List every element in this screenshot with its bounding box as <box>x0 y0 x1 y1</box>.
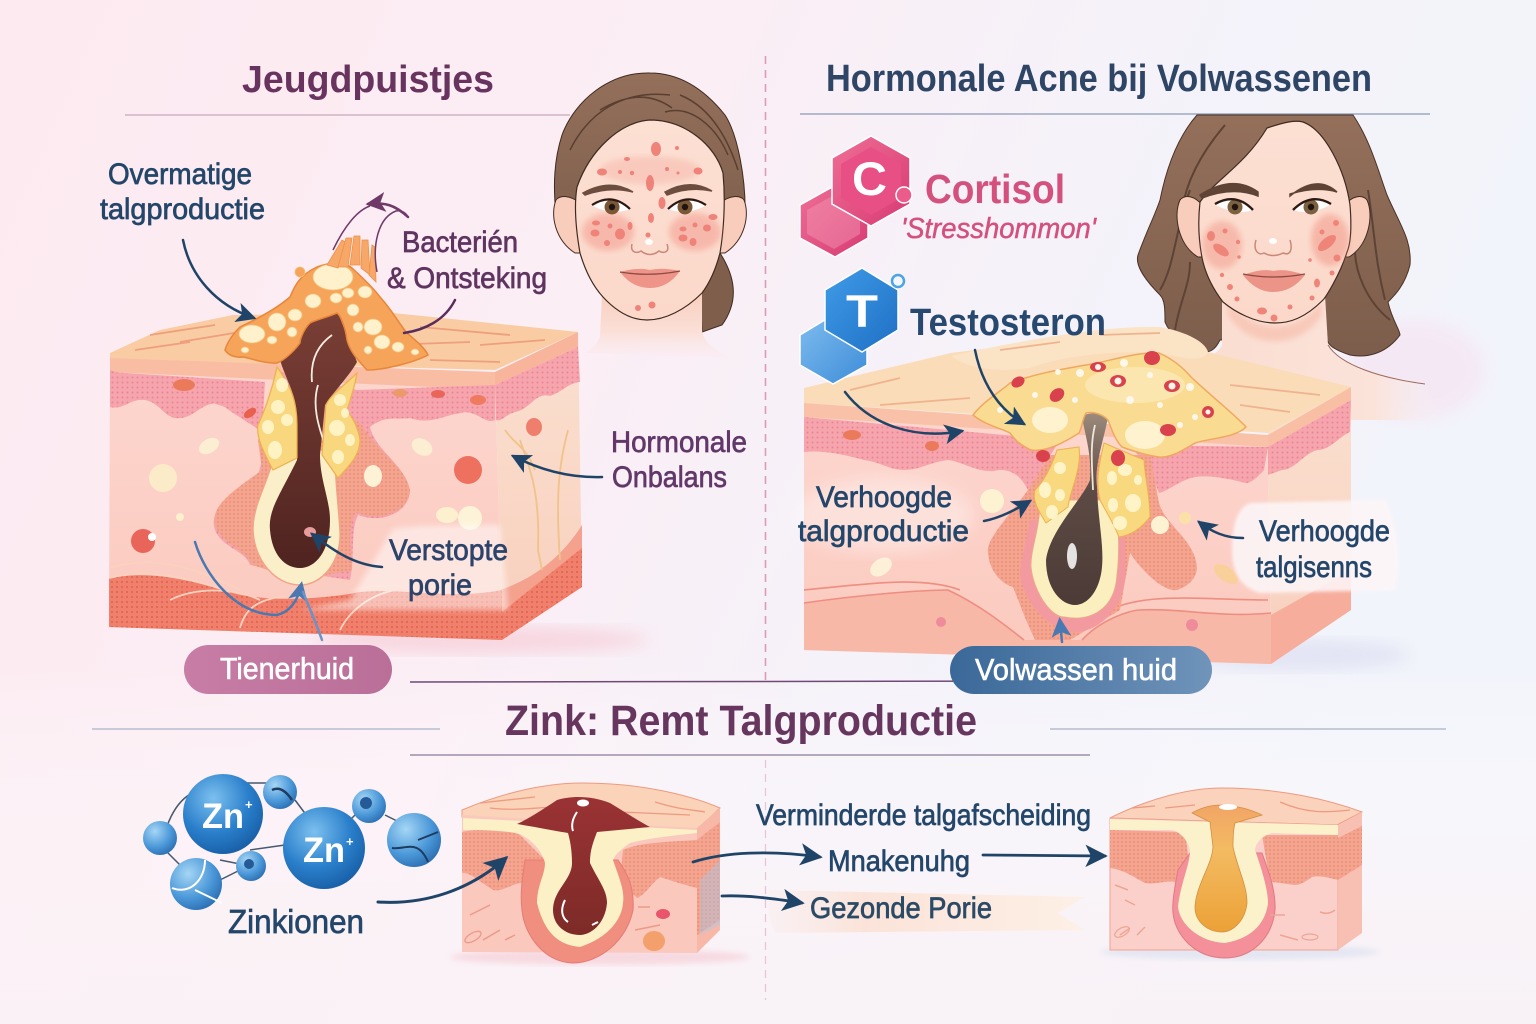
pill: Volwassen huid <box>950 646 1212 694</box>
front <box>1110 818 1338 950</box>
arrows: results <box>693 853 1105 903</box>
face shape <box>1199 121 1351 323</box>
glands <box>988 455 1197 640</box>
label: Hormonale Onbalans: Hormonale <box>611 426 747 459</box>
label: Verhoogde talgisenns: talgisenns <box>1256 551 1372 584</box>
face shape <box>576 120 724 320</box>
plug <box>1192 805 1262 932</box>
ears <box>554 197 582 253</box>
follicle cream <box>1031 500 1119 618</box>
label: Verhoogde talgisenns <box>1256 515 1390 584</box>
label: Bacterien & Ontsteking: Bacterién <box>402 226 518 259</box>
label: Verstopte porie: Verstopte <box>389 534 508 567</box>
eyes and mouth <box>583 185 712 288</box>
hexagon badge: Testosteron: T <box>846 286 878 337</box>
gland orange fill <box>214 410 410 580</box>
details <box>470 905 660 940</box>
zinc ions cluster: Zn <box>303 831 345 870</box>
cream <box>1110 819 1338 943</box>
banner: Gezonde Porie: Gezonde Porie <box>810 892 992 925</box>
eyes and mouth <box>1200 184 1337 292</box>
top surface <box>804 327 1351 433</box>
neck and shoulders <box>1180 295 1440 420</box>
hypodermis <box>109 575 502 640</box>
erupted sebum <box>225 263 428 370</box>
label: Verstopte porie <box>389 534 508 602</box>
label: Zinkionen: Zinkionen <box>228 903 364 940</box>
label: Mnakenuhg: Mnakenuhg <box>828 845 970 878</box>
zinc ions cluster: Zn <box>202 797 244 836</box>
right side <box>1338 812 1362 950</box>
label: Bacterien & Ontsteking <box>387 226 547 295</box>
facial redness <box>582 142 721 311</box>
front face <box>109 358 502 640</box>
follicle cream <box>253 450 340 585</box>
pink ring <box>521 860 633 963</box>
label: Overmatige talgproductie <box>100 158 265 226</box>
label hazes <box>794 477 974 553</box>
hypodermis <box>804 590 1271 664</box>
illustration: teenage face <box>554 73 746 358</box>
label: Verstopte porie: porie <box>408 569 472 602</box>
illustration: adult face <box>1137 115 1485 420</box>
zinc ions cluster: + <box>245 797 253 812</box>
sebaceous clusters <box>1034 447 1079 523</box>
label: Verhoogde talgproductie <box>798 481 969 548</box>
pink follicle ring <box>1020 520 1126 632</box>
label: Overmatige talgproductie: Overmatige <box>108 158 252 191</box>
right face <box>1268 387 1351 664</box>
dotted bands <box>462 830 545 890</box>
arrow: zinc to pore <box>378 858 506 902</box>
label: Overmatige talgproductie: talgproductie <box>100 193 265 226</box>
bacteria cluster <box>327 236 376 282</box>
label: Hormonale Onbalans: Onbalans <box>612 461 727 494</box>
neck <box>585 290 730 358</box>
skin flap <box>951 327 1208 370</box>
skin block: adult skin <box>794 327 1410 671</box>
pill: Tienerhuid: Tienerhuid <box>220 651 354 686</box>
hair <box>554 73 745 250</box>
ears <box>1177 197 1204 257</box>
banner: Gezonde Porie <box>768 890 1085 933</box>
label: Verhoogde talgisenns: Verhoogde <box>1259 515 1390 548</box>
pink dotted band <box>110 370 495 580</box>
heading: Zink: Zink: Remt Talgproductie <box>505 697 977 745</box>
arrows: upper panels <box>183 203 1243 642</box>
skin block: healthy pore <box>1100 788 1380 960</box>
label: Verminderde talgafscheiding: Verminderde talgafscheiding <box>756 799 1091 832</box>
skin block: teen skin <box>109 206 650 654</box>
pink ring <box>1173 853 1275 958</box>
sebaceous right <box>322 373 360 478</box>
label: Cortisol: Cortisol <box>925 166 1065 212</box>
label haze <box>300 525 508 610</box>
front face <box>804 403 1271 664</box>
dotted bands <box>1110 830 1190 883</box>
cream <box>463 818 697 947</box>
scattered cells <box>131 379 486 553</box>
bacteria outlines <box>333 206 408 272</box>
title: Jeugdpuistjes: Jeugdpuistjes <box>242 59 494 101</box>
top surface <box>110 313 578 370</box>
plug <box>1046 413 1108 605</box>
zinc ions cluster: + <box>346 834 354 849</box>
pill: Volwassen huid: Volwassen huid <box>975 652 1177 687</box>
facial redness <box>1202 214 1349 322</box>
plug <box>517 797 650 935</box>
front <box>462 815 697 953</box>
label: Testosteron: Testosteron <box>910 302 1106 344</box>
pill: Tienerhuid <box>184 645 392 694</box>
zinc ions cluster <box>143 774 441 910</box>
sebaceous left <box>258 367 297 470</box>
label: Bacterien & Ontsteking: & Ontsteking <box>387 262 547 295</box>
scattered cells <box>843 430 1241 631</box>
right side <box>697 808 720 953</box>
label: Stresshommon: 'Stresshommon' <box>901 213 1097 245</box>
ponytail <box>700 250 733 332</box>
label: Verhoogde talgproductie: Verhoogde <box>816 481 952 514</box>
hexagon badge: Cortisol: C <box>852 152 887 205</box>
right face <box>495 332 582 640</box>
hexagon badge: Cortisol <box>800 136 912 257</box>
plug <box>270 310 357 568</box>
erupted sebum <box>973 353 1246 457</box>
label: Hormonale Onbalans <box>611 426 747 494</box>
hexagon badge: Testosteron <box>800 268 904 384</box>
dome <box>462 783 720 830</box>
pink dotted band <box>804 417 1060 490</box>
dome <box>1110 788 1362 825</box>
title: Hormonale Acne bij Volwassenen: Hormonale Acne bij Volwassenen <box>826 58 1372 100</box>
skin block: treated pore <box>450 783 750 965</box>
hair <box>1137 115 1410 356</box>
label: Verhoogde talgproductie: talgproductie <box>798 515 969 548</box>
